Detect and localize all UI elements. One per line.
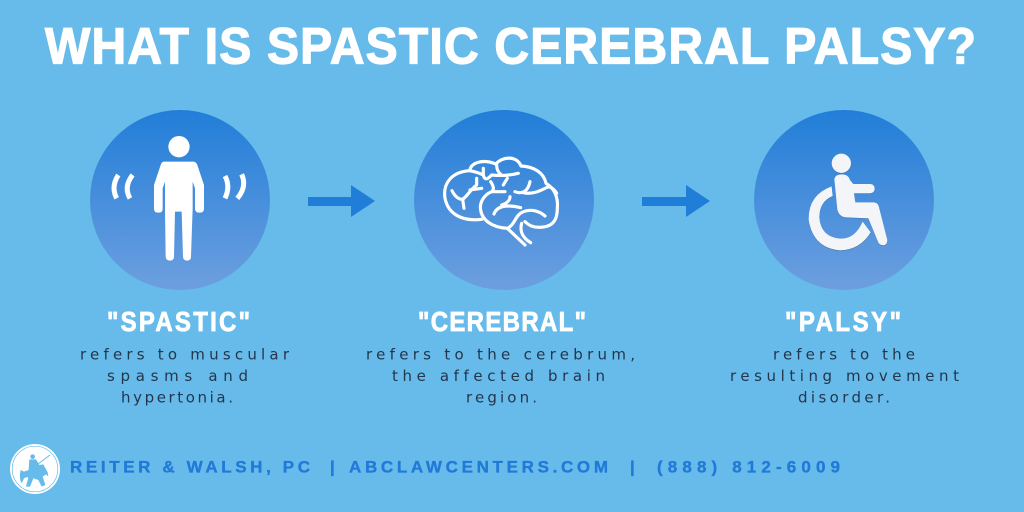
footer contact line: | [630, 458, 635, 476]
text: spastic description: refers to muscular [80, 346, 290, 364]
text: palsy description: disorder. [798, 388, 890, 406]
footer contact line: REITER & WALSH, PC [70, 458, 310, 476]
footer contact line: (888) 812-6009 [657, 458, 840, 476]
text: cerebral description: refers to the cerebrum, [366, 346, 635, 364]
icon: logo rider on horse [10, 444, 60, 494]
title: WHAT IS SPASTIC CEREBRAL PALSY? [45, 17, 976, 75]
panel: palsy [730, 110, 959, 406]
icon: spastic person [90, 110, 270, 290]
footer contact line: ABCLAWCENTERS.COM [349, 458, 608, 476]
text: palsy description: refers to the [773, 346, 915, 364]
text: cerebral description [366, 346, 635, 406]
icon: brain [414, 110, 594, 290]
arrow 2 [642, 185, 710, 217]
text: spastic description [80, 346, 290, 406]
text: cerebral description: the affected brain [392, 367, 605, 385]
heading: spastic: "SPASTIC" [107, 305, 250, 337]
text: cerebral description: region. [466, 388, 537, 406]
icon: wheelchair [754, 110, 934, 290]
panel: cerebral [366, 110, 635, 406]
text: spastic description: hypertonia. [121, 388, 233, 406]
arrow 1 [308, 185, 375, 217]
footer [10, 444, 840, 494]
panel: spastic [80, 110, 290, 406]
heading: palsy: "PALSY" [785, 305, 901, 337]
text: palsy description [730, 346, 959, 406]
text: spastic description: spasms and [107, 367, 248, 385]
heading: cerebral: "CEREBRAL" [418, 305, 586, 337]
footer contact line: | [330, 458, 335, 476]
text: palsy description: resulting movement [730, 367, 959, 385]
